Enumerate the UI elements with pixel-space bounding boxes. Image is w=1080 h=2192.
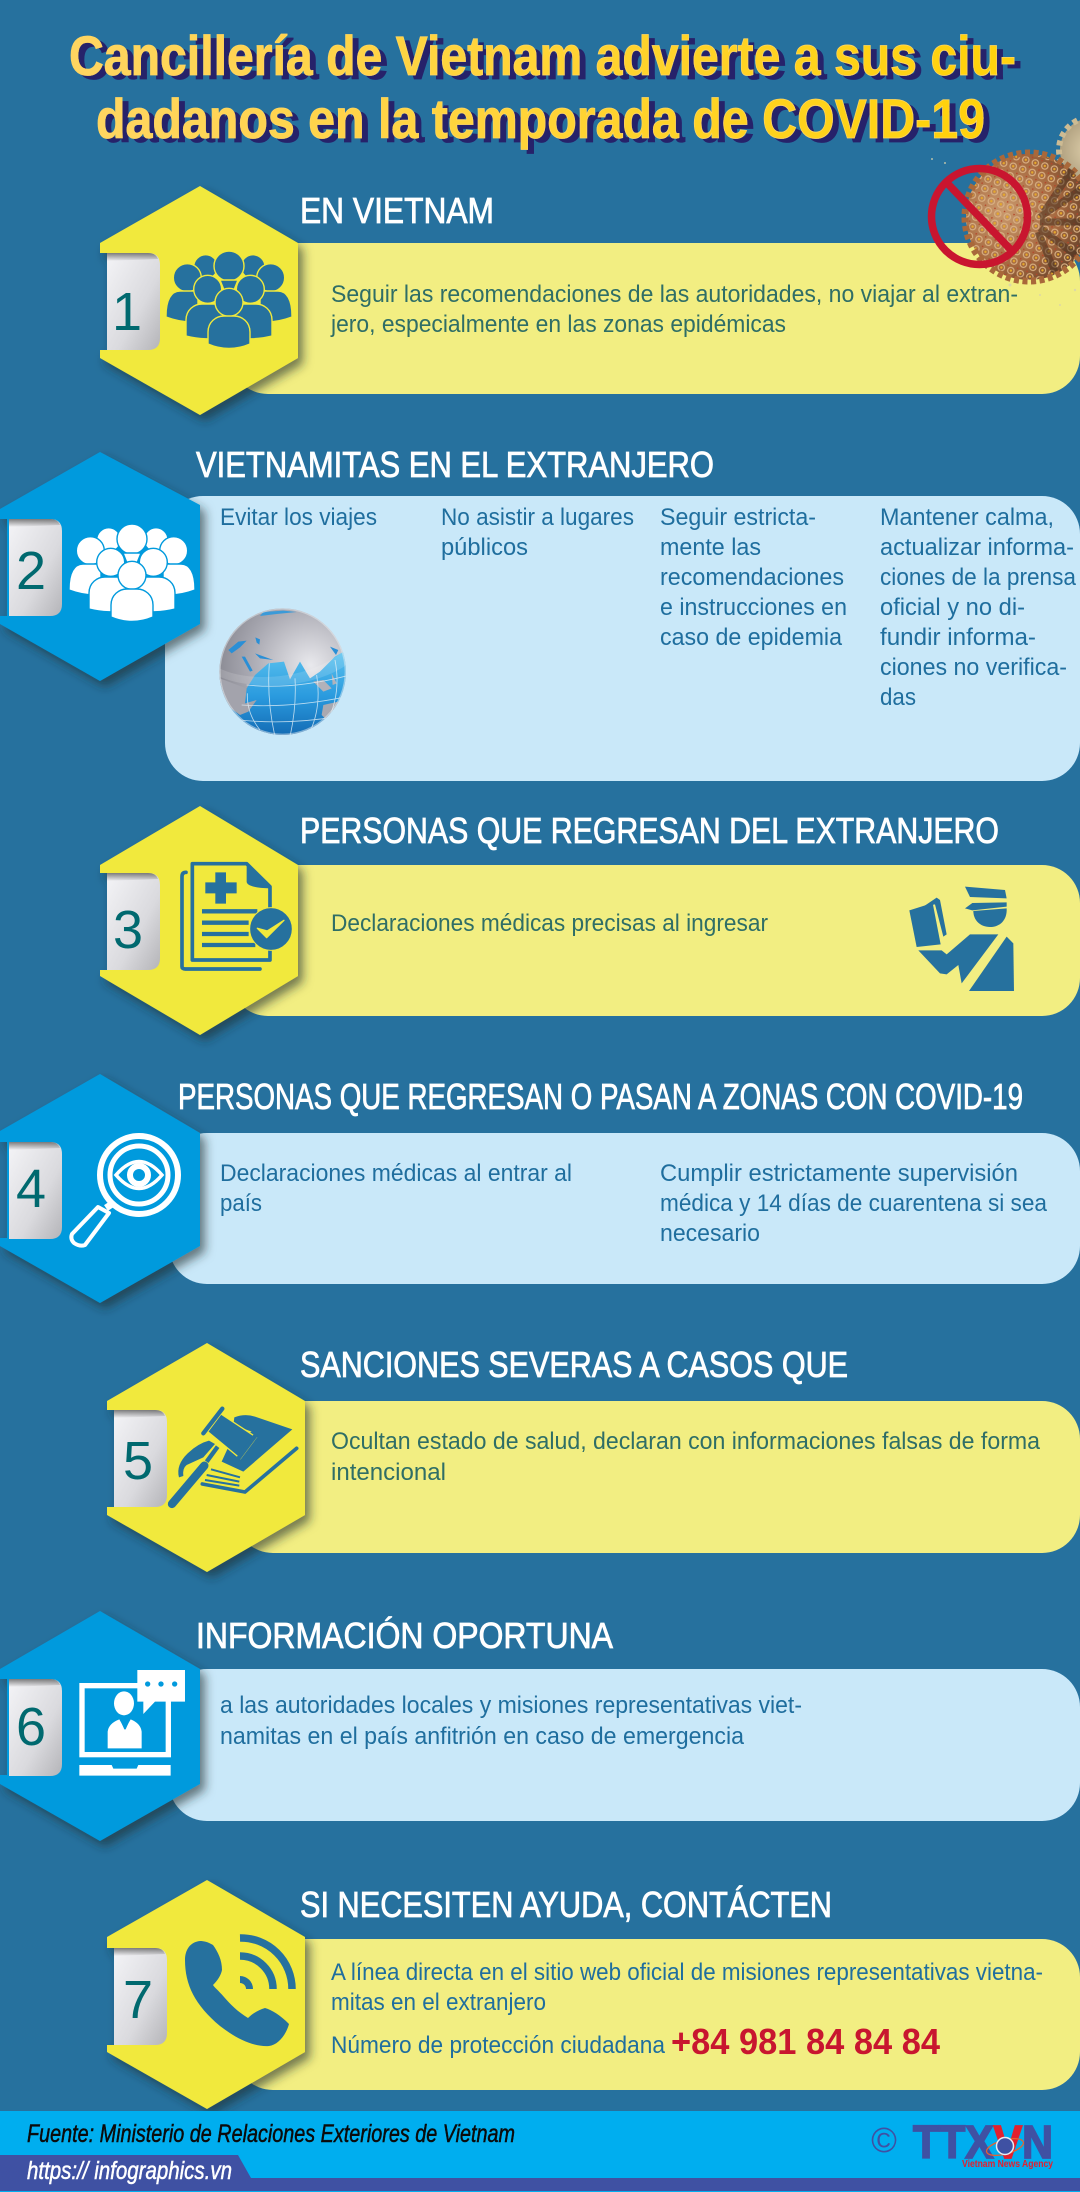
column 3: mente las — [660, 534, 761, 561]
speckles — [931, 158, 1076, 306]
column 4: actualizar informa- — [880, 534, 1074, 561]
number tab 1 — [107, 253, 160, 350]
card 5 — [235, 1401, 1080, 1553]
body text 6: namitas en el país anfitrión en caso de emergencia — [220, 1723, 745, 1750]
column 3: e instrucciones en — [660, 594, 847, 621]
body text 7: mitas en el extranjero — [331, 1989, 546, 2016]
column right: necesario — [660, 1220, 760, 1247]
card 7 — [235, 1939, 1080, 2090]
logo: TTXVN: TTXVN — [913, 2116, 1053, 2168]
phone number: +84 981 84 84 84 — [671, 2021, 940, 2062]
hexagon 6 — [0, 1611, 200, 1841]
number tab 4: 4 — [16, 1159, 46, 1219]
panel: 4 personas que regresan o pasan — [0, 1074, 1080, 1303]
column 4: das — [880, 684, 916, 711]
logo: TTXVN: Vietnam News Agency — [962, 2158, 1053, 2170]
panel: 7 si necesiten ayuda — [107, 1880, 1080, 2109]
icon: medical document — [182, 864, 292, 969]
title — [69, 24, 1016, 150]
logo: TTXVN: © — [871, 2121, 897, 2160]
column 4 — [880, 504, 1077, 711]
column 4: Mantener calma, — [880, 504, 1054, 531]
panel: 6 información oportuna — [0, 1611, 1080, 1841]
main virus — [965, 153, 1080, 281]
number tab 7 — [114, 1948, 167, 2045]
column 4: oficial y no di- — [880, 594, 1025, 621]
number tab 2 — [9, 519, 62, 616]
column left — [220, 1160, 572, 1217]
column left: país — [220, 1190, 262, 1217]
panel: 3 personas que regresan del extranjero — [100, 806, 1080, 1035]
body text 1: jero, especialmente en las zonas epidémicas — [330, 311, 786, 338]
footer band — [0, 2111, 1080, 2192]
icon: magnifier with eye — [71, 1136, 178, 1246]
column left: Declaraciones médicas al entrar al — [220, 1160, 572, 1187]
icon: monitor with person and speech bubble — [79, 1670, 185, 1776]
second virus — [1059, 117, 1080, 183]
heading 7: SI NECESITEN AYUDA, CONTÁCTEN — [300, 1884, 832, 1925]
heading 5: SANCIONES SEVERAS A CASOS QUE — [300, 1344, 848, 1385]
panel: 2 vietnamitas en el extranjero — [0, 444, 1080, 781]
column 3 — [660, 504, 847, 651]
number tab 1: 1 — [112, 282, 142, 342]
card 1 — [230, 243, 1080, 394]
body text 7: A línea directa en el sitio web oficial de misiones representativas vietna- — [331, 1959, 1043, 1986]
icon: people crowd — [166, 251, 292, 348]
heading 6: INFORMACIÓN OPORTUNA — [196, 1615, 613, 1656]
body text 1: Seguir las recomendaciones de las autoridades, no viajar al extran- — [331, 281, 1018, 308]
heading 1: EN VIETNAM — [300, 190, 494, 231]
number tab 6 — [9, 1679, 62, 1776]
card 4 — [169, 1133, 1080, 1284]
column 3: caso de epidemia — [660, 624, 843, 651]
card 3 — [230, 865, 1080, 1016]
column 4: ciones no verifica- — [880, 654, 1067, 681]
body text 5: Ocultan estado de salud, declaran con informaciones falsas de forma — [331, 1428, 1041, 1455]
number tab 4 — [9, 1142, 62, 1239]
hexagon 5 — [107, 1343, 305, 1572]
panel: 1 en Vietnam — [100, 186, 1080, 415]
column 2 — [441, 504, 634, 561]
column right — [660, 1160, 1048, 1247]
icon: gavel and book — [172, 1409, 297, 1504]
body text 6: a las autoridades locales y misiones representativas viet- — [220, 1692, 802, 1719]
panel: 5 sanciones severas — [107, 1343, 1080, 1572]
column 3: Seguir estricta- — [660, 504, 816, 531]
icon: virus with prohibition sign — [931, 117, 1080, 306]
column right: Cumplir estrictamente supervisión — [660, 1160, 1018, 1187]
number tab 2: 2 — [16, 541, 46, 601]
body text 7 — [331, 1959, 1043, 2059]
hexagon 7 — [107, 1880, 305, 2109]
hexagon 3 — [100, 806, 298, 1035]
body text 5: intencional — [331, 1459, 446, 1486]
hexagon 2 — [0, 452, 200, 681]
number tab 6: 6 — [16, 1697, 46, 1757]
source: Fuente: Ministerio de Relaciones Exteriores de Vietnam — [27, 2120, 515, 2148]
icon: globe — [219, 608, 346, 735]
footer bottom bar — [0, 2155, 1080, 2191]
column 1: Evitar los viajes — [220, 504, 377, 531]
icon: people crowd — [69, 524, 195, 622]
number tab 5: 5 — [123, 1431, 153, 1491]
body text 1 — [330, 281, 1018, 338]
column 3: recomendaciones — [660, 564, 844, 591]
hexagon 1 — [100, 186, 298, 415]
column 2: No asistir a lugares — [441, 504, 634, 531]
heading 2: VIETNAMITAS EN EL EXTRANJERO — [196, 444, 714, 485]
prohibition sign — [932, 168, 1028, 264]
number tab 3: 3 — [113, 900, 143, 960]
column right: médica y 14 días de cuarentena si sea — [660, 1190, 1048, 1217]
number tab 5 — [114, 1410, 167, 1507]
number tab 7: 7 — [123, 1970, 153, 2030]
icon: phone with signal — [185, 1938, 292, 2046]
hexagon 4 — [0, 1074, 200, 1303]
body text 7: Número de protección ciudadana — [331, 2032, 666, 2059]
card 2 — [165, 496, 1080, 781]
website: https:// infographics.vn — [27, 2157, 232, 2185]
icon: officer reading passport — [909, 887, 1014, 991]
body text 3: Declaraciones médicas precisas al ingresar — [331, 910, 768, 937]
footer — [0, 2111, 1080, 2192]
number tab 3 — [107, 873, 160, 970]
column 4: fundir informa- — [880, 624, 1036, 651]
card 6 — [169, 1669, 1080, 1821]
body text 6 — [220, 1692, 802, 1750]
body text 5 — [331, 1428, 1041, 1486]
column 2: públicos — [441, 534, 528, 561]
